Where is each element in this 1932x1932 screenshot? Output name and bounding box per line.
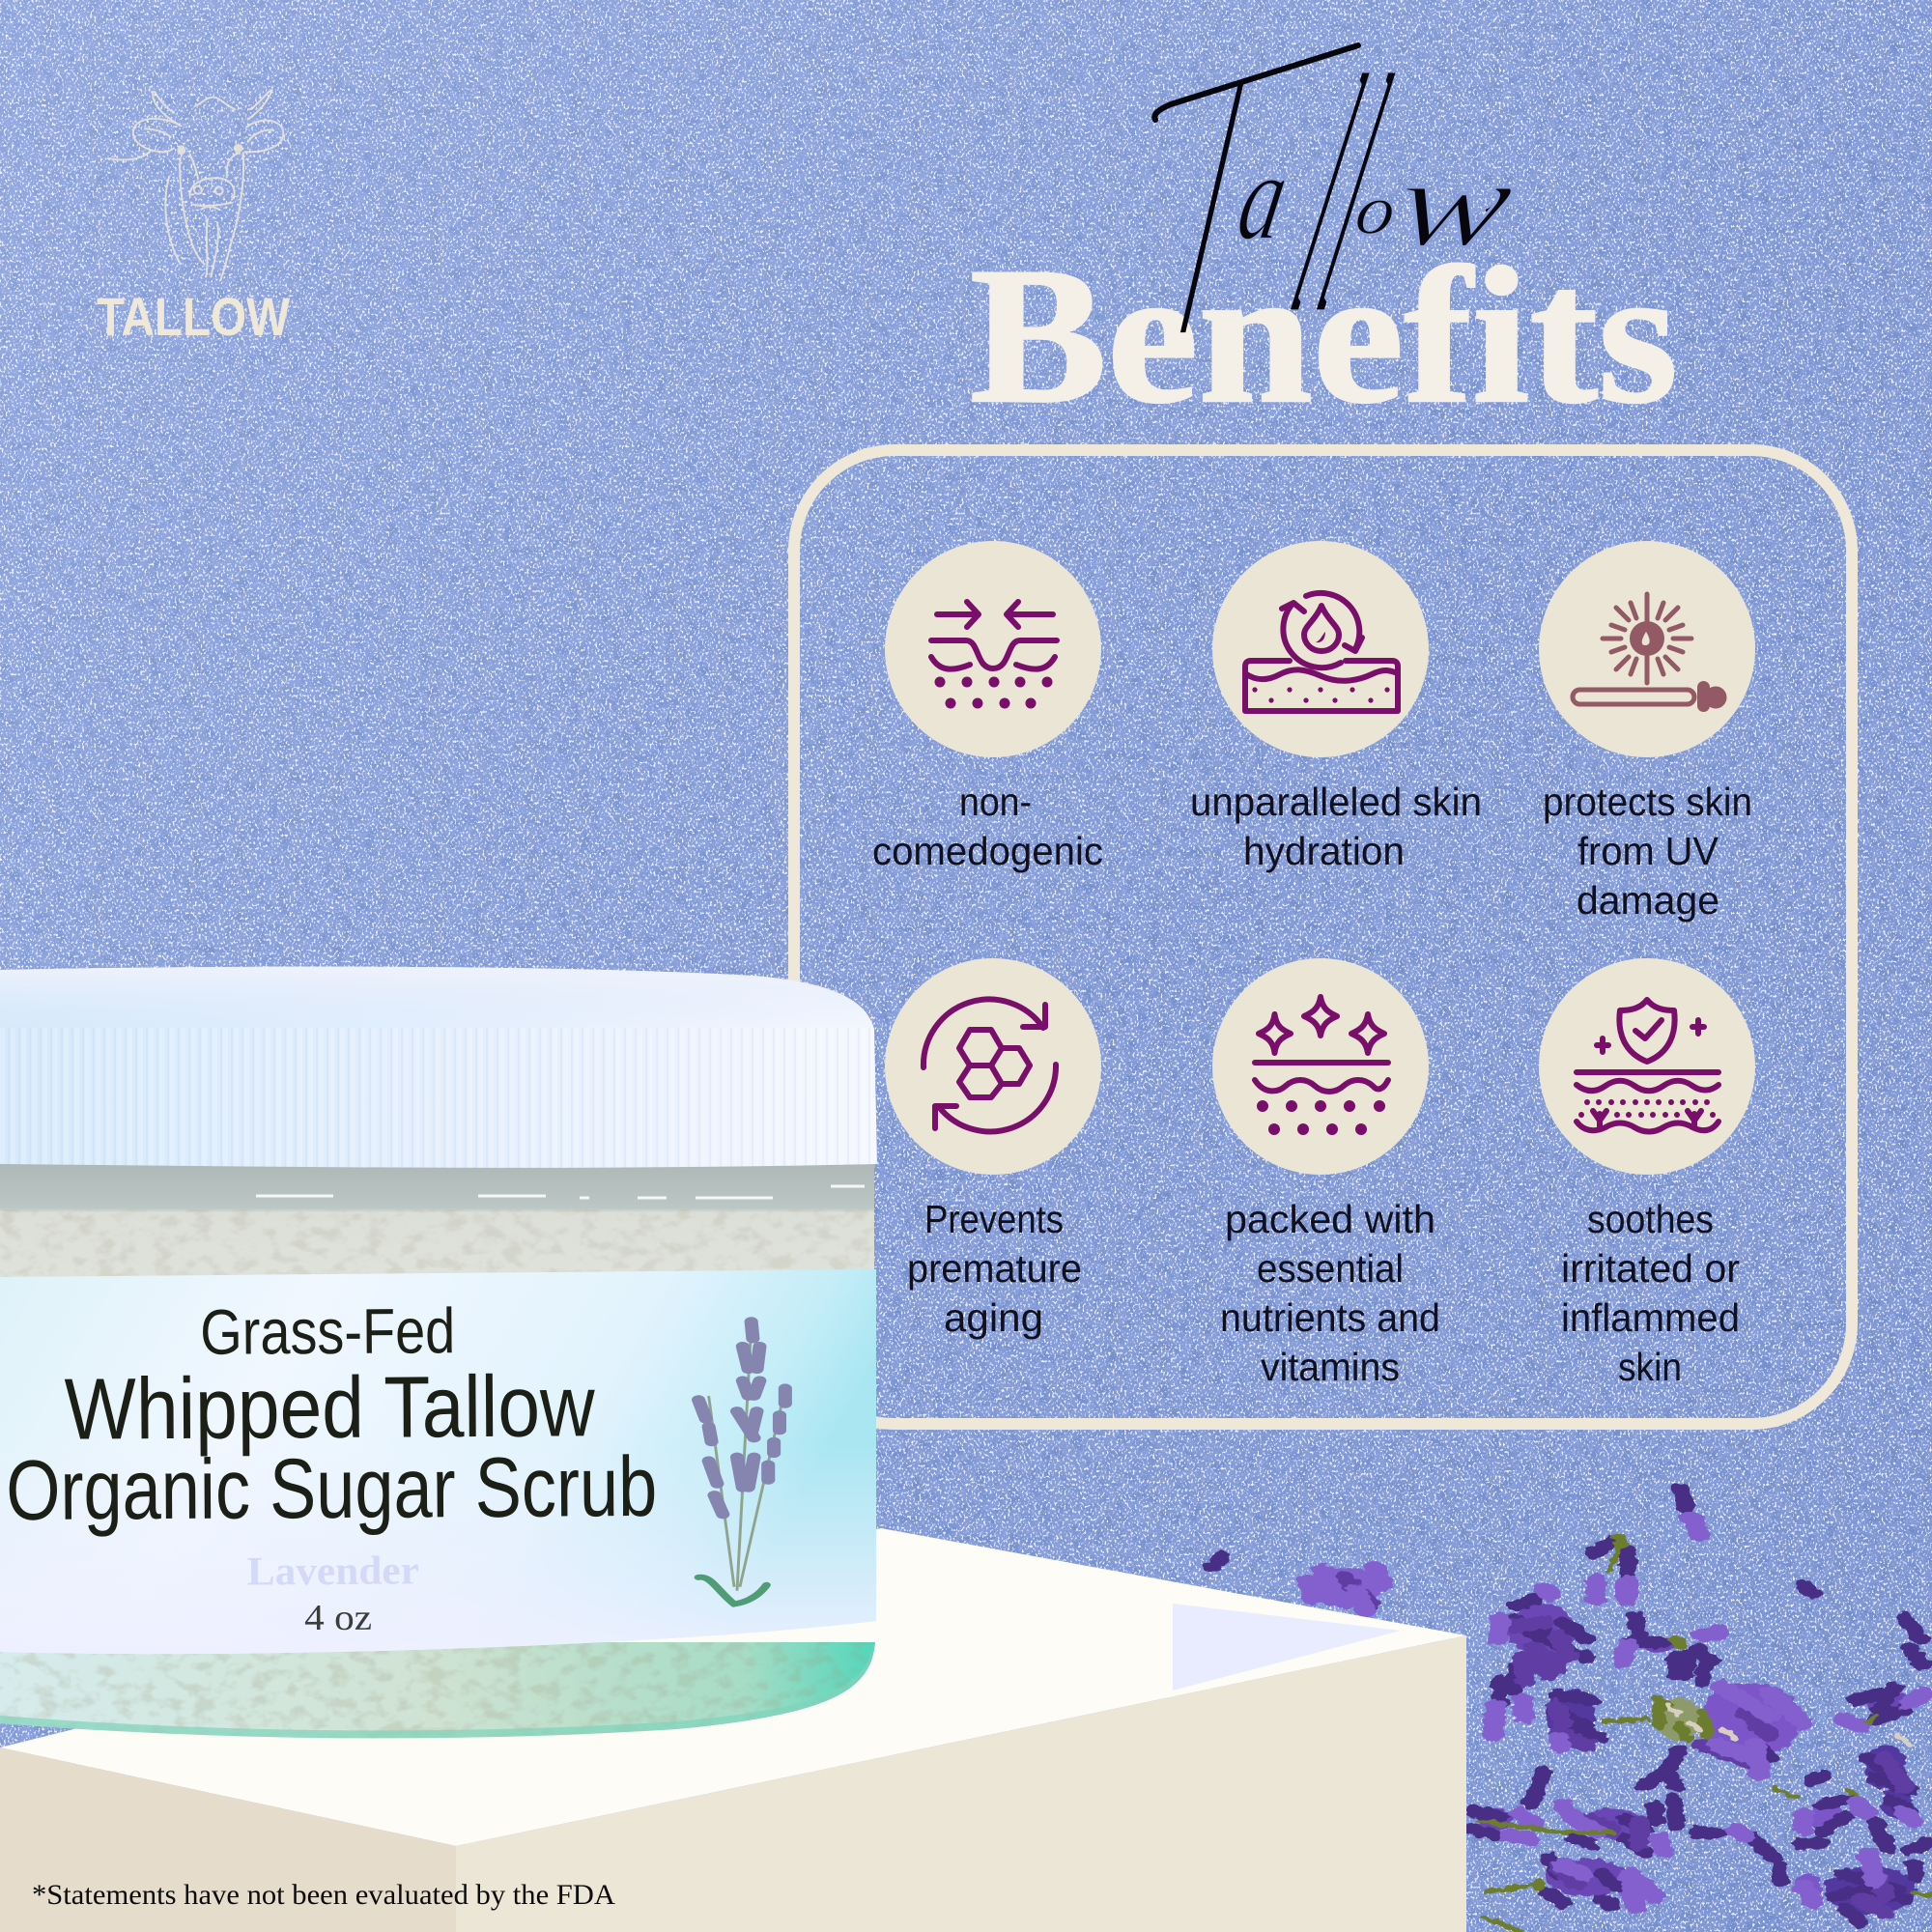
label: irritated or [1561, 1246, 1740, 1291]
label: premature [907, 1246, 1082, 1291]
label: aging [944, 1295, 1043, 1340]
lavender flowers scattered bottom right [1212, 1490, 1932, 1932]
benefit 5: packed with essential nutrients and vitamins [1212, 958, 1440, 1389]
label: from UV [1577, 829, 1719, 873]
title: Tallow script: w [1388, 133, 1522, 272]
label: skin [1618, 1345, 1682, 1389]
icon: lavender sprig on label [698, 1321, 785, 1605]
label text: Whipped Tallow [64, 1358, 596, 1459]
label text: Grass-Fed [200, 1294, 455, 1368]
label: essential [1257, 1246, 1404, 1291]
label: comedogenic [872, 829, 1103, 873]
icon: water drop cycle over skin [1212, 541, 1429, 757]
benefit 6: soothes irritated or inflammed skin [1539, 958, 1755, 1389]
jar glass neck with sugar [0, 1164, 874, 1280]
label: soothes [1587, 1197, 1714, 1241]
title: Tallow script: o [1350, 171, 1401, 249]
label text: Organic Sugar Scrub [6, 1438, 658, 1538]
label: inflammed [1561, 1295, 1740, 1340]
jar lid [0, 967, 877, 1168]
logo: cow line art and TALLOW wordmark [97, 90, 290, 347]
jar bottom with sugar [0, 1642, 876, 1748]
pedestal [0, 1528, 1466, 1932]
panel: benefits outline [794, 450, 1852, 1424]
label: Prevents [924, 1197, 1064, 1241]
label: vitamins [1261, 1345, 1400, 1389]
heading: Benefits: Benefits [970, 227, 1678, 443]
label: nutrients and [1220, 1295, 1440, 1340]
label: non- [959, 780, 1032, 824]
icon: sun and dropper [1539, 541, 1755, 757]
disclaimer: *Statements have not been evaluated by the FDA [32, 1879, 615, 1911]
title: Tallow script: a [1229, 127, 1298, 267]
product: jar of whipped tallow sugar scrub [0, 967, 877, 1748]
label: packed with [1225, 1197, 1435, 1241]
icon: honeycomb with renewal arrows [885, 958, 1101, 1175]
label: damage [1577, 878, 1719, 923]
label text [5, 1293, 658, 1640]
benefit 3: protects skin from UV damage [1539, 541, 1755, 923]
label: hydration [1243, 829, 1405, 873]
icon: pore tightening skin [885, 541, 1101, 757]
benefit 4: prevents premature aging [885, 958, 1101, 1340]
label: unparalleled skin [1190, 780, 1482, 824]
label text: 4 oz [304, 1598, 372, 1638]
icon: sparkles over skin layers [1212, 958, 1429, 1175]
icon: shield over skin [1539, 958, 1755, 1175]
logo: cow line art and TALLOW wordmark: TALLOW [97, 286, 290, 347]
benefit 1: non-comedogenic [872, 541, 1103, 873]
jar label [0, 1269, 876, 1654]
title: Tallow script: ll [1266, 6, 1429, 384]
label text: Lavender [247, 1548, 419, 1595]
benefit 2: unparalleled skin hydration [1190, 541, 1482, 873]
title: Tallow script [1151, 6, 1522, 384]
label: protects skin [1543, 780, 1752, 824]
